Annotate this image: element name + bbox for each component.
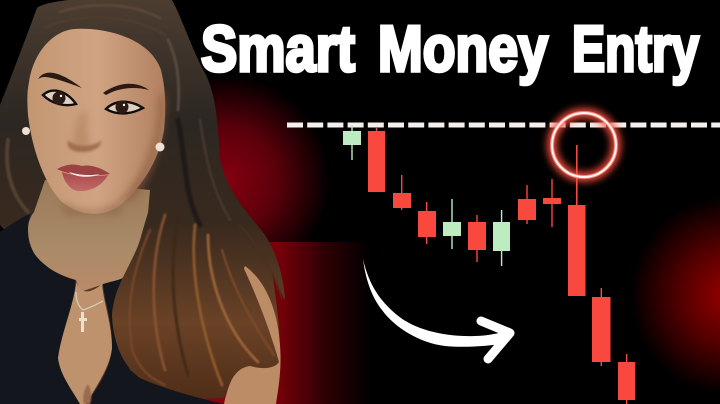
lips (57, 164, 110, 191)
red candle 3 (393, 175, 411, 210)
red candle 8 (518, 185, 536, 224)
red candle 2 (368, 127, 385, 192)
portrait of presenter (0, 0, 285, 404)
curved arrow (363, 259, 510, 359)
keyhole skin (58, 282, 112, 404)
red candle 11 (592, 288, 610, 366)
dashed resistance line (287, 122, 720, 128)
cleavage shadow (83, 384, 91, 404)
title (201, 12, 699, 85)
hair strands (7, 5, 282, 385)
green candle 5 (443, 199, 461, 249)
dress (0, 214, 224, 404)
candlestick chart (343, 125, 635, 404)
nose (68, 140, 101, 152)
right shoulder (224, 266, 281, 404)
red candle 9 (543, 179, 561, 227)
face shading (60, 90, 165, 215)
red candle 12 (618, 354, 635, 404)
green candle 7 (493, 210, 510, 266)
title: Smart (201, 12, 355, 85)
red candle 10 (568, 145, 586, 296)
earrings (22, 127, 164, 152)
front hair (112, 110, 279, 396)
glowing circle highlight (552, 113, 616, 177)
back hair (0, 0, 285, 404)
green candle 1 (343, 125, 361, 160)
red candle 6 (468, 215, 486, 262)
necklace with cross (76, 292, 103, 332)
neck and chest (27, 180, 150, 292)
eyes (43, 91, 143, 114)
eyebrows (38, 73, 149, 95)
title: Money (378, 12, 548, 85)
red candle 4 (418, 202, 436, 244)
face (27, 29, 165, 214)
